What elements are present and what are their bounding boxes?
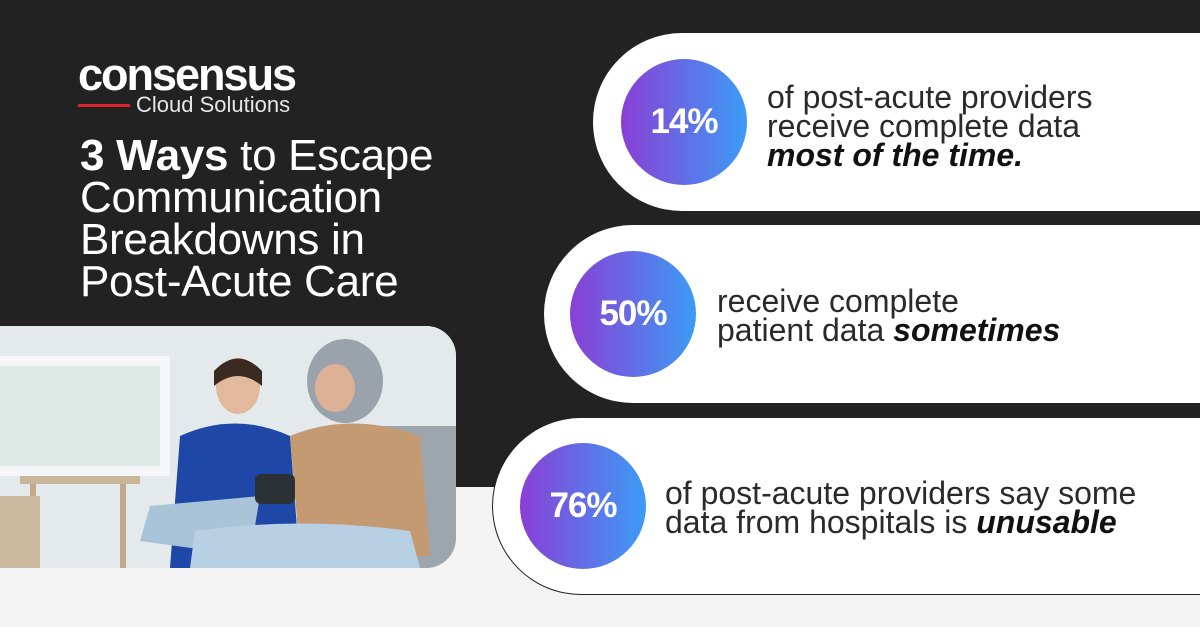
title: Post-Acute Care xyxy=(80,257,398,306)
stat text 3 xyxy=(665,475,1136,540)
stat circle 14% xyxy=(621,59,747,185)
logo: Cloud Solutions xyxy=(136,92,290,117)
title xyxy=(80,131,433,306)
stat text 2: patient data sometimes xyxy=(717,312,1060,348)
stat text 3: of post-acute providers say some xyxy=(665,475,1136,511)
stat circle 76%: 76% xyxy=(549,486,617,525)
stat circle 14%: 14% xyxy=(650,102,718,141)
title: 3 Ways to Escape xyxy=(80,131,433,180)
stat text 1: most of the time. xyxy=(767,137,1023,173)
title: Communication xyxy=(80,173,382,222)
stat circle 50% xyxy=(570,251,696,377)
logo: consensus xyxy=(78,49,295,100)
stat text 2: receive complete xyxy=(717,283,959,319)
stat text 1 xyxy=(767,79,1092,173)
stat text 3: data from hospitals is unusable xyxy=(665,504,1117,540)
photo: nurse with patient xyxy=(0,326,456,568)
stat text 1: of post-acute providers xyxy=(767,79,1092,115)
stat circle 50%: 50% xyxy=(599,294,667,333)
stat card 3 xyxy=(492,417,1200,595)
stat text 2 xyxy=(717,283,1060,348)
stat card 1 xyxy=(593,33,1200,211)
stat circle 76% xyxy=(520,443,646,569)
stat card 2 xyxy=(544,225,1200,403)
title: Breakdowns in xyxy=(80,215,365,264)
stat text 1: receive complete data xyxy=(767,108,1080,144)
